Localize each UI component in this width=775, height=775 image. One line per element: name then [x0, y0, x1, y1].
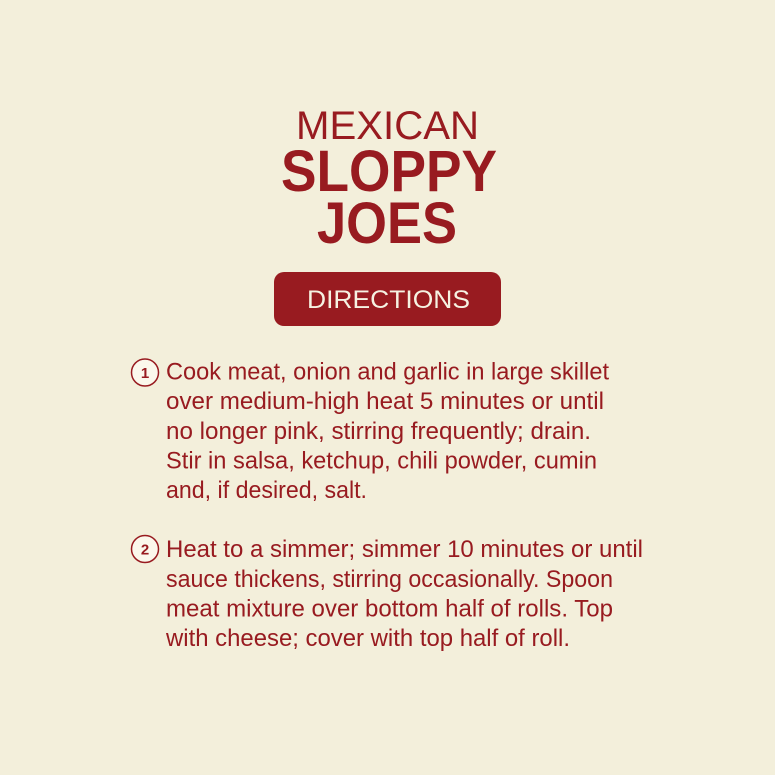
- directions badge: DIRECTIONS: [307, 286, 470, 314]
- step 2 text: meat mixture over bottom half of rolls. Top: [166, 596, 613, 622]
- icon: step number 2: [132, 536, 158, 562]
- title: SLOPPY: [281, 139, 497, 204]
- step 2 text: sauce thickens, stirring occasionally. Spoon: [166, 566, 613, 593]
- title: MEXICAN: [296, 104, 479, 148]
- title: JOES: [317, 191, 457, 256]
- step 1 text: no longer pink, stirring frequently; drain.: [166, 418, 591, 445]
- directions badge: [274, 272, 501, 326]
- step 1 text: Cook meat, onion and garlic in large skillet: [166, 358, 609, 386]
- icon: step number 1: [132, 359, 158, 386]
- step 2: [132, 536, 643, 652]
- step 2 text: [165, 536, 643, 652]
- step 1 text: [166, 358, 609, 504]
- step 1 text: and, if desired, salt.: [166, 477, 367, 504]
- title: [281, 104, 497, 256]
- step 2 text: Heat to a simmer; simmer 10 minutes or until: [166, 536, 643, 563]
- step 2 text: with cheese; cover with top half of roll.: [165, 625, 570, 652]
- step 1: [132, 358, 609, 504]
- icon: step number 1: 1: [141, 365, 149, 382]
- icon: step number 2: 2: [141, 542, 149, 558]
- step 1 text: over medium-high heat 5 minutes or until: [166, 388, 604, 415]
- step 1 text: Stir in salsa, ketchup, chili powder, cumin: [166, 448, 597, 474]
